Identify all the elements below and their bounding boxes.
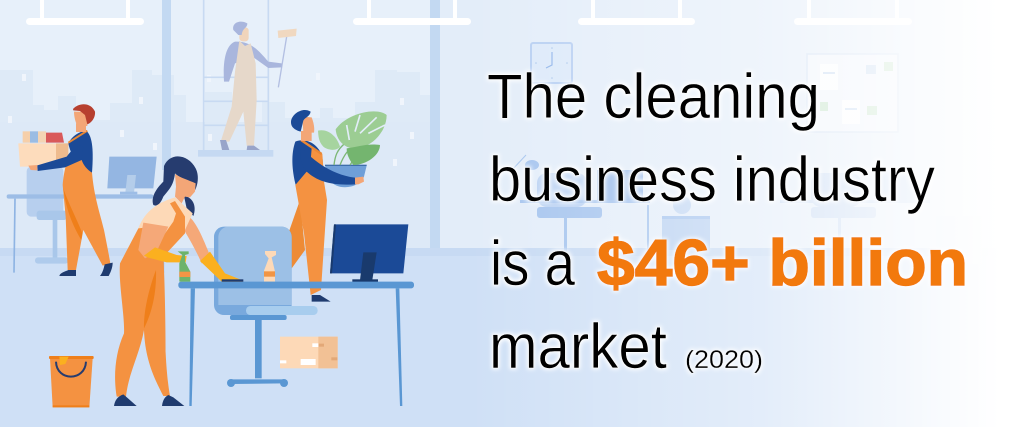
year note: (2020) [685, 346, 763, 374]
faded background desks [512, 155, 982, 264]
window cleaner figure [220, 22, 297, 150]
faded wall clock [531, 43, 572, 83]
ceiling lights [26, 0, 912, 25]
cardboard box [280, 337, 338, 368]
woman cleaning desk [114, 156, 243, 406]
highlighted market value: $46+ billion [597, 226, 968, 299]
main desk scene [178, 110, 414, 406]
man holding plant [288, 110, 387, 302]
green spray bottle [178, 251, 190, 282]
desk [178, 282, 414, 406]
background desk with monitor and chair [7, 157, 163, 273]
spray bottle beige [264, 251, 276, 282]
headline line 1: The cleaning [487, 62, 820, 132]
headline line 4: market [489, 312, 667, 382]
bucket [49, 356, 94, 407]
computer monitor [330, 224, 408, 282]
white fade to the right [470, 0, 1000, 427]
office chair [214, 227, 318, 387]
headline line 3 lead-in: is a [490, 229, 576, 299]
headline line 2: business industry [489, 145, 935, 215]
faded notice board [807, 54, 898, 132]
scaffold with window cleaner [198, 0, 297, 157]
worker carrying box [18, 104, 113, 276]
